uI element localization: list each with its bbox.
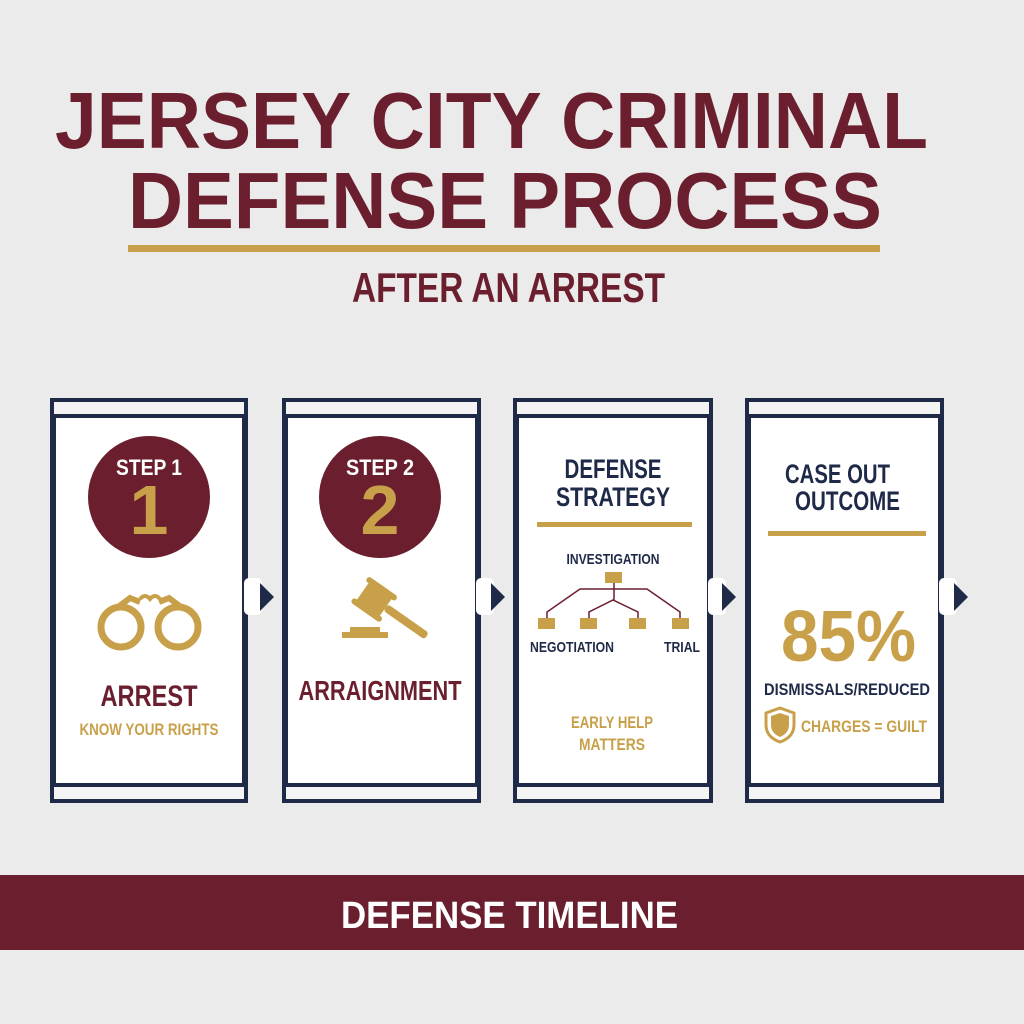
icon: shield with note: CHARGES = GUILT [801, 717, 927, 736]
icon: gavel [342, 576, 436, 649]
footer banner: DEFENSE TIMELINE [341, 895, 678, 937]
note: early help matters: EARLY HELP [571, 713, 653, 732]
step 1 badge [88, 436, 210, 558]
note: early help matters: MATTERS [579, 735, 645, 754]
step 1 badge: 1 [130, 471, 168, 549]
heading: defense strategy [556, 454, 670, 512]
step 1 badge: STEP 1 [116, 455, 182, 480]
heading: case outcome [785, 459, 900, 516]
gold divider [128, 245, 880, 252]
step 2 badge: 2 [361, 471, 399, 549]
step 2 badge: STEP 2 [346, 455, 414, 480]
step 2 badge [319, 436, 441, 558]
icon: handcuffs [101, 596, 198, 647]
diagram: strategy tree [530, 551, 700, 656]
panel: case outcome [747, 400, 942, 801]
title: JERSEY CITY CRIMINAL [55, 76, 928, 165]
stat label: DISMISSALS/REDUCED [764, 680, 930, 699]
arrow 1 [244, 578, 274, 615]
diagram: strategy tree: NEGOTIATION [530, 639, 614, 656]
heading: case outcome: CASE OUT [785, 459, 890, 489]
footer banner [0, 875, 1024, 950]
title [55, 76, 928, 245]
title: DEFENSE PROCESS [128, 156, 882, 245]
icon: shield with note [766, 708, 927, 742]
note: early help matters [571, 713, 653, 754]
panel: defense strategy [515, 400, 711, 801]
arrow 4 [939, 578, 968, 615]
stat: 85%: 85% [781, 597, 916, 677]
label: arrest: ARREST [100, 680, 198, 713]
heading: defense strategy: DEFENSE [564, 454, 662, 484]
label: arraignment: ARRAIGNMENT [298, 675, 462, 706]
panel: step 1 arrest [52, 400, 246, 801]
diagram: strategy tree: TRIAL [664, 639, 700, 656]
subtitle: AFTER AN ARREST [352, 264, 665, 311]
arrow 2 [476, 578, 505, 615]
heading: defense strategy: STRATEGY [556, 482, 670, 512]
heading: case outcome: OUTCOME [795, 486, 900, 516]
arrow 3 [708, 578, 736, 615]
sublabel: know your rights: KNOW YOUR RIGHTS [80, 720, 218, 739]
diagram: strategy tree: INVESTIGATION [566, 551, 660, 568]
panel: step 2 arraignment [284, 400, 479, 801]
